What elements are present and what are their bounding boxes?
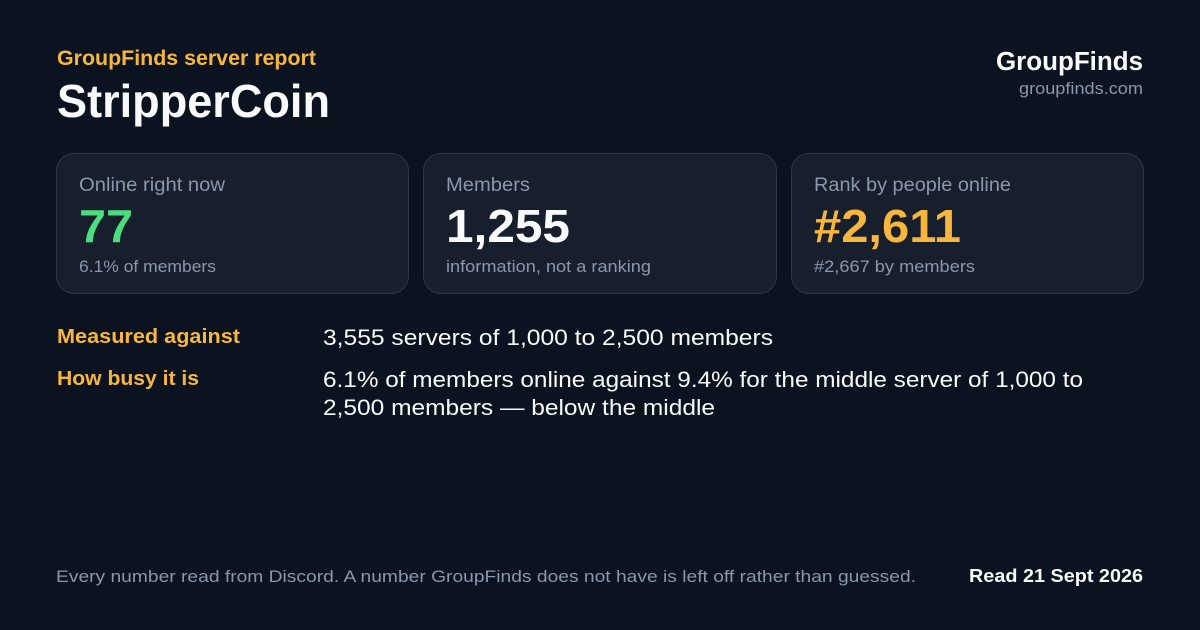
row text: busyness comparison xyxy=(323,367,1083,420)
row: measured against xyxy=(57,325,773,350)
brand block xyxy=(996,48,1143,98)
label: rank by people online: Rank by people online xyxy=(814,175,1011,196)
value: online count: 77 xyxy=(79,200,133,252)
row heading: measured against: Measured against xyxy=(57,325,240,348)
value: online rank: #2,611 xyxy=(814,200,961,252)
label: online right now: Online right now xyxy=(79,175,225,196)
label: members: Members xyxy=(446,175,530,196)
note: share of members: 6.1% of members xyxy=(79,257,216,276)
brand name: GroupFinds xyxy=(996,48,1143,76)
note: not a ranking: information, not a ranking xyxy=(446,257,651,276)
row: how busy it is xyxy=(57,367,1083,420)
panel: online right now xyxy=(56,154,408,294)
panel: rank by people online xyxy=(792,154,1144,294)
row text: busyness comparison: 6.1% of members online against 9.4% for the middle server of 1,000 to xyxy=(323,367,1083,392)
footer note: Every number read from Discord. A number GroupFinds does not have is left off rather than guessed. xyxy=(56,567,916,586)
footer date: Read 21 Sept 2026 xyxy=(969,566,1143,586)
report eyebrow heading: GroupFinds server report xyxy=(57,46,316,70)
server name title: StripperCoin xyxy=(57,75,330,127)
row heading: how busy it is: How busy it is xyxy=(57,367,199,390)
note: rank by members: #2,667 by members xyxy=(814,257,975,276)
row text: comparison group: 3,555 servers of 1,000 to 2,500 members xyxy=(323,325,773,350)
brand url: groupfinds.com xyxy=(1019,79,1143,98)
row text: busyness comparison: 2,500 members — below the middle xyxy=(323,395,715,420)
value: member count: 1,255 xyxy=(446,200,570,252)
panel: members xyxy=(424,154,776,294)
